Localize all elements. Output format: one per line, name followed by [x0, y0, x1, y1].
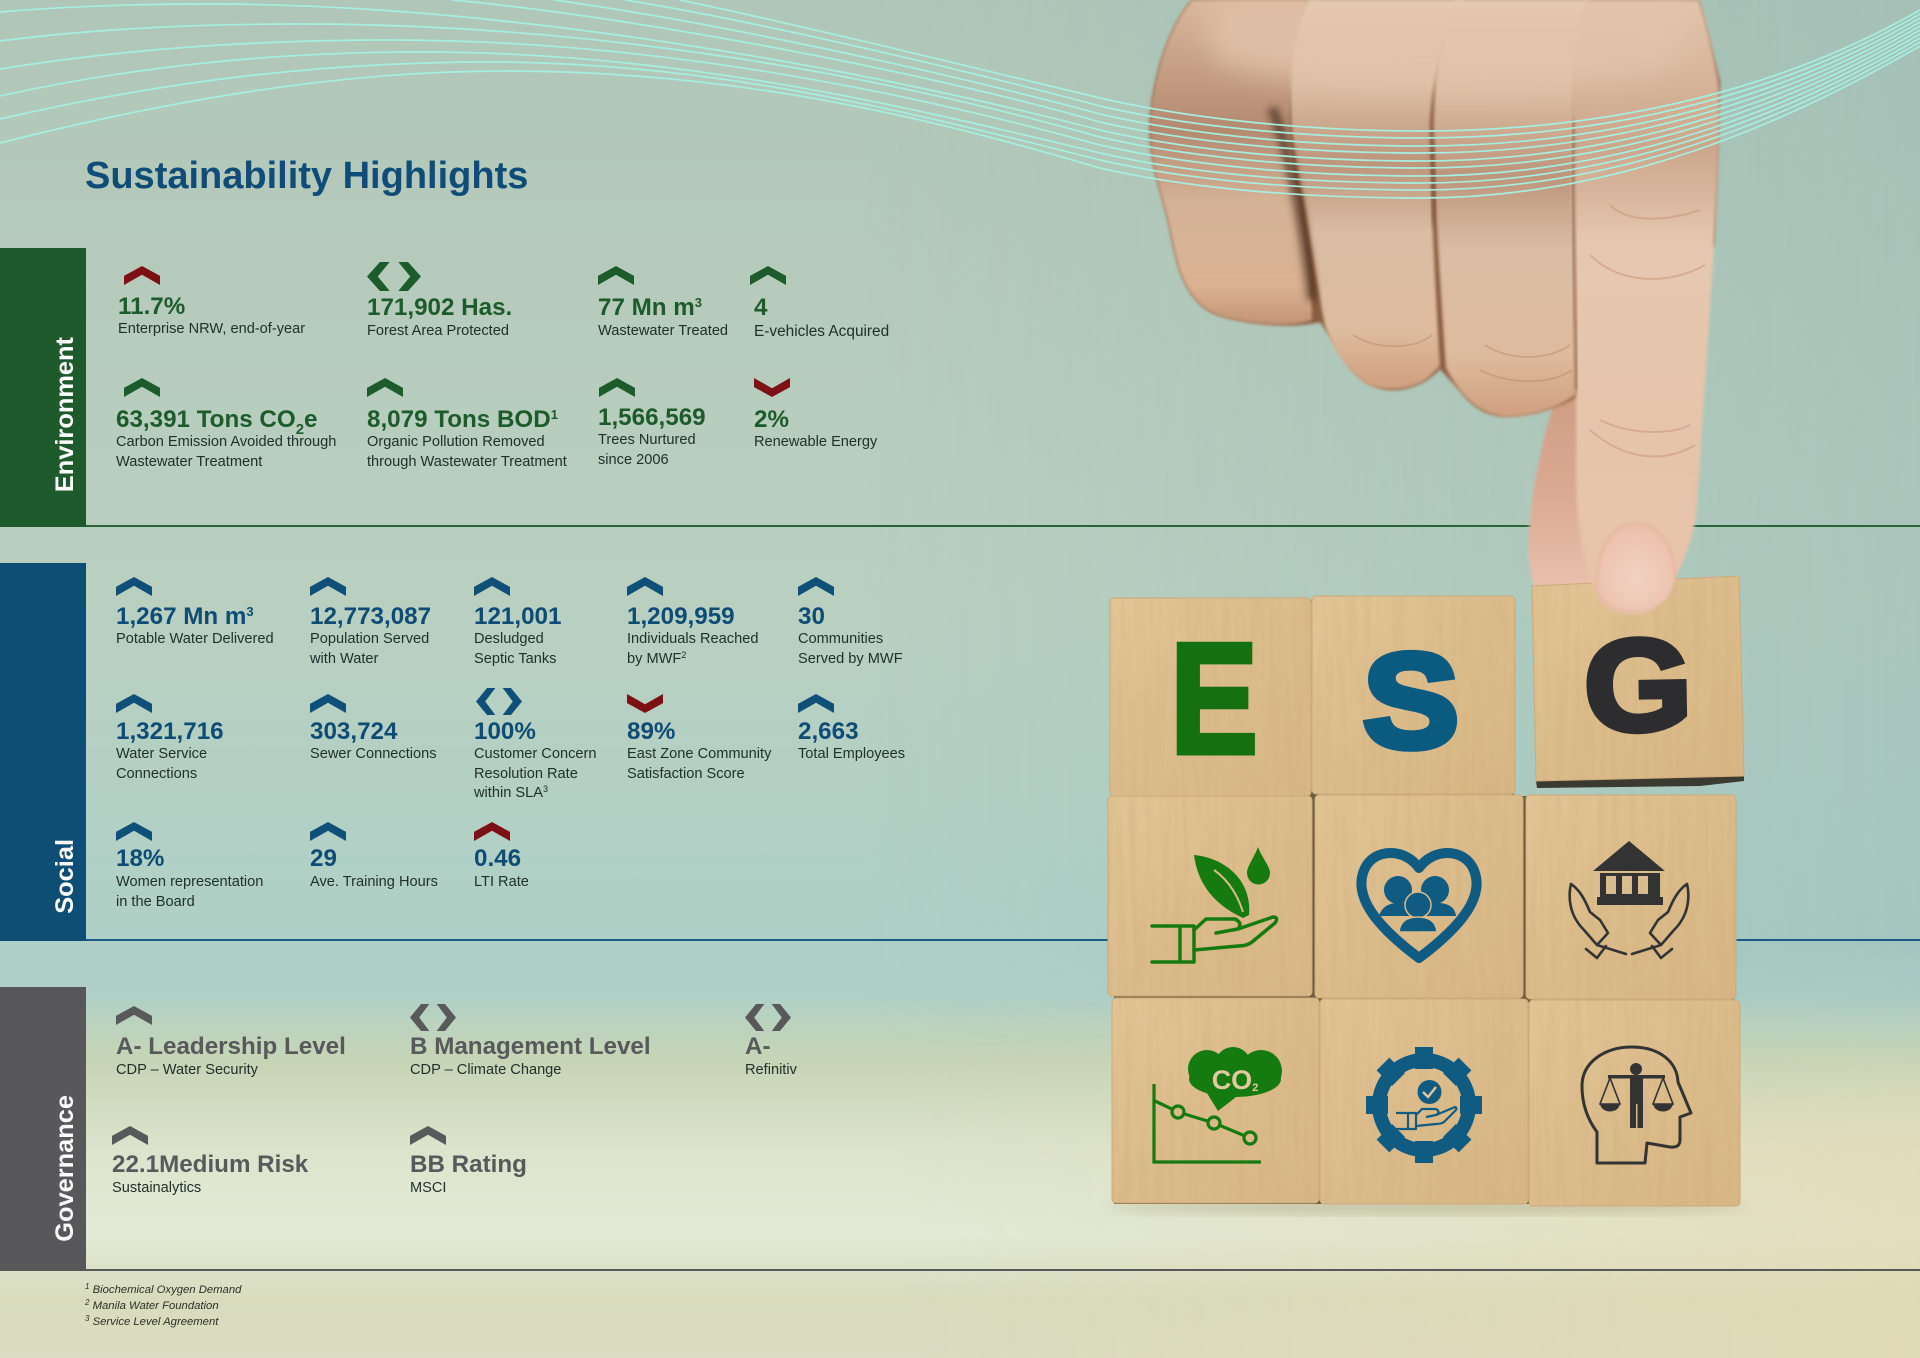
metric: communities served [798, 577, 903, 666]
label: MSCI [410, 1180, 446, 1196]
icon: up arrow [750, 266, 786, 285]
divider: environment [0, 525, 1920, 527]
footnotes: 3 Service Level Agreement [85, 1314, 218, 1328]
icon: CO2 cloud and declining chart: CO [1212, 1065, 1252, 1095]
label: Septic Tanks [474, 650, 556, 666]
icon: up arrow [474, 822, 510, 841]
metric: e-vehicles [750, 266, 889, 340]
label: Ave. Training Hours [310, 874, 438, 890]
icon: down arrow [627, 694, 663, 713]
icon: gear with hand and check [1366, 1047, 1482, 1163]
label: Served by MWF [798, 650, 903, 666]
thumb behind block [1528, 390, 1610, 592]
value: 1,321,716 [116, 718, 224, 745]
icon: up arrow [798, 694, 834, 713]
label: Connections [116, 766, 197, 782]
label: Organic Pollution Removed [367, 434, 545, 450]
value: 89% [627, 718, 675, 745]
icon: steady arrows [745, 1004, 791, 1031]
label: through Wastewater Treatment [367, 454, 567, 470]
icon: up arrow [367, 378, 403, 397]
icon: up arrow [116, 694, 152, 713]
divider: governance [0, 1269, 1920, 1271]
metric: sewer connections [310, 694, 437, 762]
metric: Refinitiv [745, 1004, 797, 1078]
icon: steady arrows [367, 262, 421, 291]
icon: institution held by hands [1570, 841, 1688, 958]
label: Carbon Emission Avoided through [116, 434, 336, 450]
label: Wastewater Treated [598, 323, 728, 339]
metric: CDP climate change [410, 1004, 651, 1078]
label: CDP – Water Security [116, 1062, 258, 1078]
metric: wastewater treated [598, 266, 728, 339]
value: 63,391 Tons CO2e [116, 406, 317, 438]
heading: Social: Social [51, 839, 79, 914]
value: 18% [116, 845, 164, 872]
metric: renewable energy [754, 378, 878, 450]
value: 100% [474, 718, 536, 745]
icon: steady arrows [410, 1004, 456, 1031]
label: in the Board [116, 894, 195, 910]
label: Desludged [474, 631, 544, 647]
label: Resolution Rate [474, 766, 578, 782]
value: 22.1Medium Risk [112, 1151, 308, 1178]
icon: up arrow [598, 266, 634, 285]
label [310, 631, 429, 666]
value: 0.46 [474, 845, 521, 872]
label: E-vehicles Acquired [754, 323, 889, 340]
icon: down arrow [754, 378, 790, 397]
metric: potable water [116, 577, 274, 647]
label: within SLA3 [474, 784, 548, 801]
metric: community satisfaction [627, 694, 772, 782]
value: 1,267 Mn m3 [116, 603, 254, 630]
label [627, 746, 772, 782]
label: Wastewater Treatment [116, 454, 262, 470]
label [116, 874, 263, 910]
panel: governance band [0, 987, 86, 1271]
label: East Zone Community [627, 746, 771, 762]
label [798, 631, 903, 666]
label: Forest Area Protected [367, 323, 509, 339]
value: 29 [310, 845, 337, 872]
title: Sustainability Highlights [85, 155, 528, 197]
metric: carbon avoided [116, 378, 336, 470]
icon: up arrow [410, 1126, 446, 1145]
block letter S: S [1363, 627, 1459, 776]
wave lines [0, 0, 1920, 198]
label: Sewer Connections [310, 746, 437, 762]
value: A- Leadership Level [116, 1033, 346, 1060]
label: Renewable Energy [754, 434, 877, 450]
icon: heart with people [1361, 853, 1477, 958]
label: Women representation [116, 874, 263, 890]
value: 1,209,959 [627, 603, 735, 630]
label: Potable Water Delivered [116, 631, 274, 647]
icon: up arrow [310, 822, 346, 841]
value: 303,724 [310, 718, 397, 745]
label: Customer Concern [474, 746, 596, 762]
value: A- [745, 1033, 771, 1060]
value: 4 [754, 294, 767, 321]
icon: up arrow [798, 577, 834, 596]
icon: up arrow [310, 694, 346, 713]
icon: up arrow [112, 1126, 148, 1145]
icon: head with justice scales [1582, 1047, 1691, 1163]
metric: LTI rate [474, 822, 529, 890]
block letter E: E [1170, 611, 1258, 787]
value: 77 Mn m3 [598, 294, 702, 321]
footnotes: 1 Biochemical Oxygen Demand [85, 1282, 241, 1296]
value: 8,079 Tons BOD1 [367, 406, 558, 433]
label: Sustainalytics [112, 1180, 201, 1196]
metric: organic pollution [367, 378, 567, 470]
value: 11.7% [118, 293, 185, 320]
label [598, 432, 696, 468]
label: with Water [310, 650, 378, 666]
footnotes [85, 1282, 242, 1328]
panel: environment band [0, 248, 86, 527]
icon: up arrow [124, 266, 160, 285]
label: Refinitiv [745, 1062, 797, 1078]
metric: trees nurtured [598, 378, 706, 468]
metric: enterprise NRW [118, 266, 305, 337]
label [474, 631, 556, 666]
value: 171,902 Has. [367, 294, 512, 321]
icon: up arrow [310, 577, 346, 596]
metric: Sustainalytics [112, 1126, 308, 1196]
label [367, 434, 567, 470]
label: Individuals Reached [627, 631, 758, 647]
hand silhouette and fingers [1150, 0, 1720, 615]
icon: up arrow [599, 378, 635, 397]
value: 2,663 [798, 718, 859, 745]
value: 121,001 [474, 603, 561, 630]
wooden blocks [1100, 570, 1750, 1210]
value: 1,566,569 [598, 404, 706, 431]
metric: MSCI [410, 1126, 527, 1196]
panel: social band [0, 563, 86, 941]
label: Population Served [310, 631, 429, 647]
metric: desludged tanks [474, 577, 561, 666]
label: Total Employees [798, 746, 905, 762]
value: B Management Level [410, 1033, 651, 1060]
icon: up arrow [124, 378, 160, 397]
icon: leaf, water drop and hand [1152, 847, 1277, 962]
label [474, 746, 596, 801]
label: Water Service [116, 746, 207, 762]
divider: social [0, 939, 1920, 941]
value: 2% [754, 406, 789, 433]
icon: up arrow [474, 577, 510, 596]
metric: individuals reached [627, 577, 758, 666]
heading: Environment: Environment [51, 337, 79, 492]
icon: CO2 cloud and declining chart: 2 [1252, 1082, 1258, 1094]
label: CDP – Climate Change [410, 1062, 561, 1078]
label: Enterprise NRW, end-of-year [118, 321, 305, 337]
icon: up arrow [116, 1006, 152, 1025]
table shadow [1105, 1201, 1745, 1213]
value: BB Rating [410, 1151, 527, 1178]
metric: water service connections [116, 694, 224, 782]
icon: CO2 cloud and declining chart [1154, 1047, 1282, 1162]
metric: training hours [310, 822, 438, 890]
icon: up arrow [116, 577, 152, 596]
metric: customer concern resolution [474, 688, 596, 801]
value: 30 [798, 603, 825, 630]
label [627, 631, 758, 666]
label [116, 434, 336, 470]
metric: total employees [798, 694, 905, 762]
heading: Governance: Governance [51, 1095, 79, 1242]
block letter G: G [1583, 611, 1693, 759]
metric: CDP water security [116, 1006, 346, 1078]
footnotes: 2 Manila Water Foundation [85, 1298, 219, 1312]
label: by MWF2 [627, 650, 686, 666]
label: Communities [798, 631, 883, 647]
icon: up arrow [116, 822, 152, 841]
label: LTI Rate [474, 874, 529, 890]
label [116, 746, 207, 782]
label: Trees Nurtured [598, 432, 696, 448]
label: Satisfaction Score [627, 766, 745, 782]
icon: steady arrows [476, 688, 522, 715]
value: 12,773,087 [310, 603, 431, 630]
label: since 2006 [598, 452, 669, 468]
metric: population served [310, 577, 431, 666]
metric: forest area [367, 262, 512, 339]
icon: up arrow [627, 577, 663, 596]
metric: women on board [116, 822, 263, 910]
